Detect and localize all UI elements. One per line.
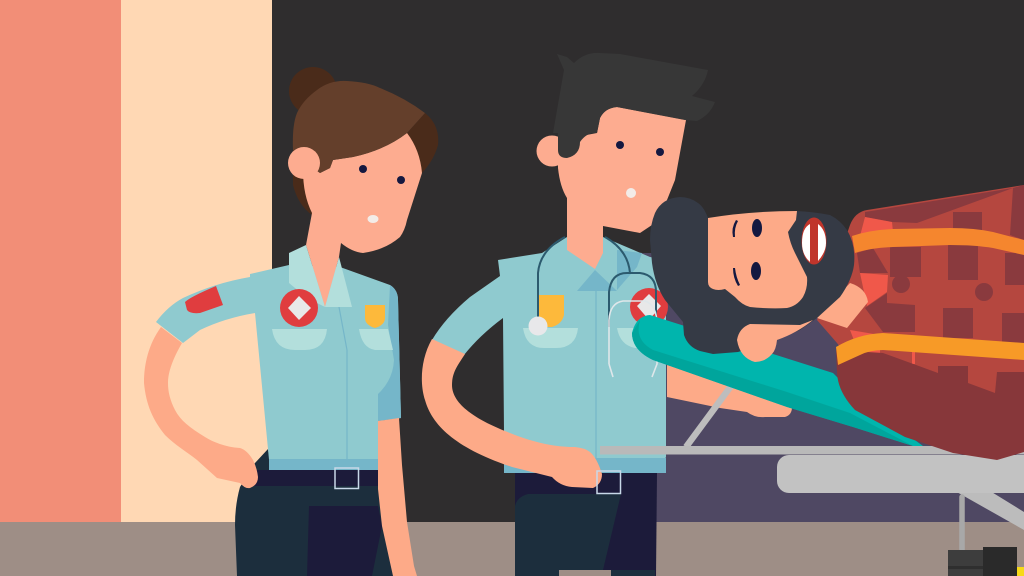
- trousers: [836, 350, 1024, 460]
- stretcher frame: [600, 386, 1024, 576]
- plaid shirt: [817, 185, 1024, 400]
- patient: [650, 185, 1024, 460]
- figure: female paramedic: [144, 67, 438, 576]
- open mouth: [802, 218, 826, 264]
- shirt centre seam: [339, 307, 347, 459]
- plaid dark pattern: [857, 185, 1024, 343]
- mouth: [626, 188, 636, 198]
- hair: [293, 81, 425, 173]
- beard and hair: [650, 197, 854, 354]
- shirt: [156, 265, 401, 470]
- thin hook: [962, 497, 1003, 557]
- trousers: [235, 449, 396, 576]
- skin: shoulder: [817, 283, 868, 328]
- left arm: [144, 327, 258, 488]
- trouser panel: [307, 506, 382, 576]
- right arm: [378, 418, 417, 576]
- shield: [365, 305, 385, 328]
- far arm: [667, 365, 792, 417]
- hair bun and back hair: [289, 67, 438, 215]
- floor patch: [559, 570, 611, 576]
- strap lower: [836, 333, 1024, 365]
- ear and neck: [737, 320, 813, 362]
- strap upper: [852, 228, 1024, 255]
- ear: [536, 136, 568, 166]
- pockets: [523, 328, 650, 348]
- figure: male paramedic: [422, 53, 792, 576]
- plaid bright pattern: [850, 217, 915, 364]
- stretcher back pad: [632, 315, 923, 446]
- stethoscope: [538, 237, 657, 377]
- face and neck: [558, 107, 686, 269]
- collar: [289, 245, 352, 307]
- face: [708, 211, 807, 308]
- belt: [252, 470, 380, 486]
- eyes: [359, 165, 405, 184]
- eyebrows: [732, 220, 740, 286]
- pockets: [272, 329, 393, 350]
- trouser panel: [515, 494, 655, 576]
- ear: [288, 147, 320, 179]
- legs: [955, 491, 1024, 530]
- diagonal support: [686, 386, 731, 447]
- mattress base: [777, 455, 1024, 493]
- belt buckle: [597, 471, 620, 494]
- eyes: [751, 219, 762, 280]
- eyes: [616, 141, 664, 156]
- wheel box: [948, 547, 1024, 576]
- rail: [600, 446, 1024, 454]
- badge: [280, 289, 318, 327]
- stethoscope chest piece: [528, 316, 548, 336]
- shirt shade: [269, 285, 401, 470]
- mouth: [368, 215, 378, 223]
- trousers: [515, 473, 657, 576]
- shirt centre seam: [595, 291, 597, 458]
- hair: [553, 53, 715, 158]
- shirt shade: [504, 250, 666, 473]
- arm patch: [185, 286, 223, 313]
- face and neck: [303, 133, 422, 307]
- belt buckle: [335, 468, 358, 488]
- left arm: [422, 339, 602, 488]
- shield: [538, 295, 564, 327]
- shirt: [432, 237, 666, 473]
- badge: [630, 288, 668, 326]
